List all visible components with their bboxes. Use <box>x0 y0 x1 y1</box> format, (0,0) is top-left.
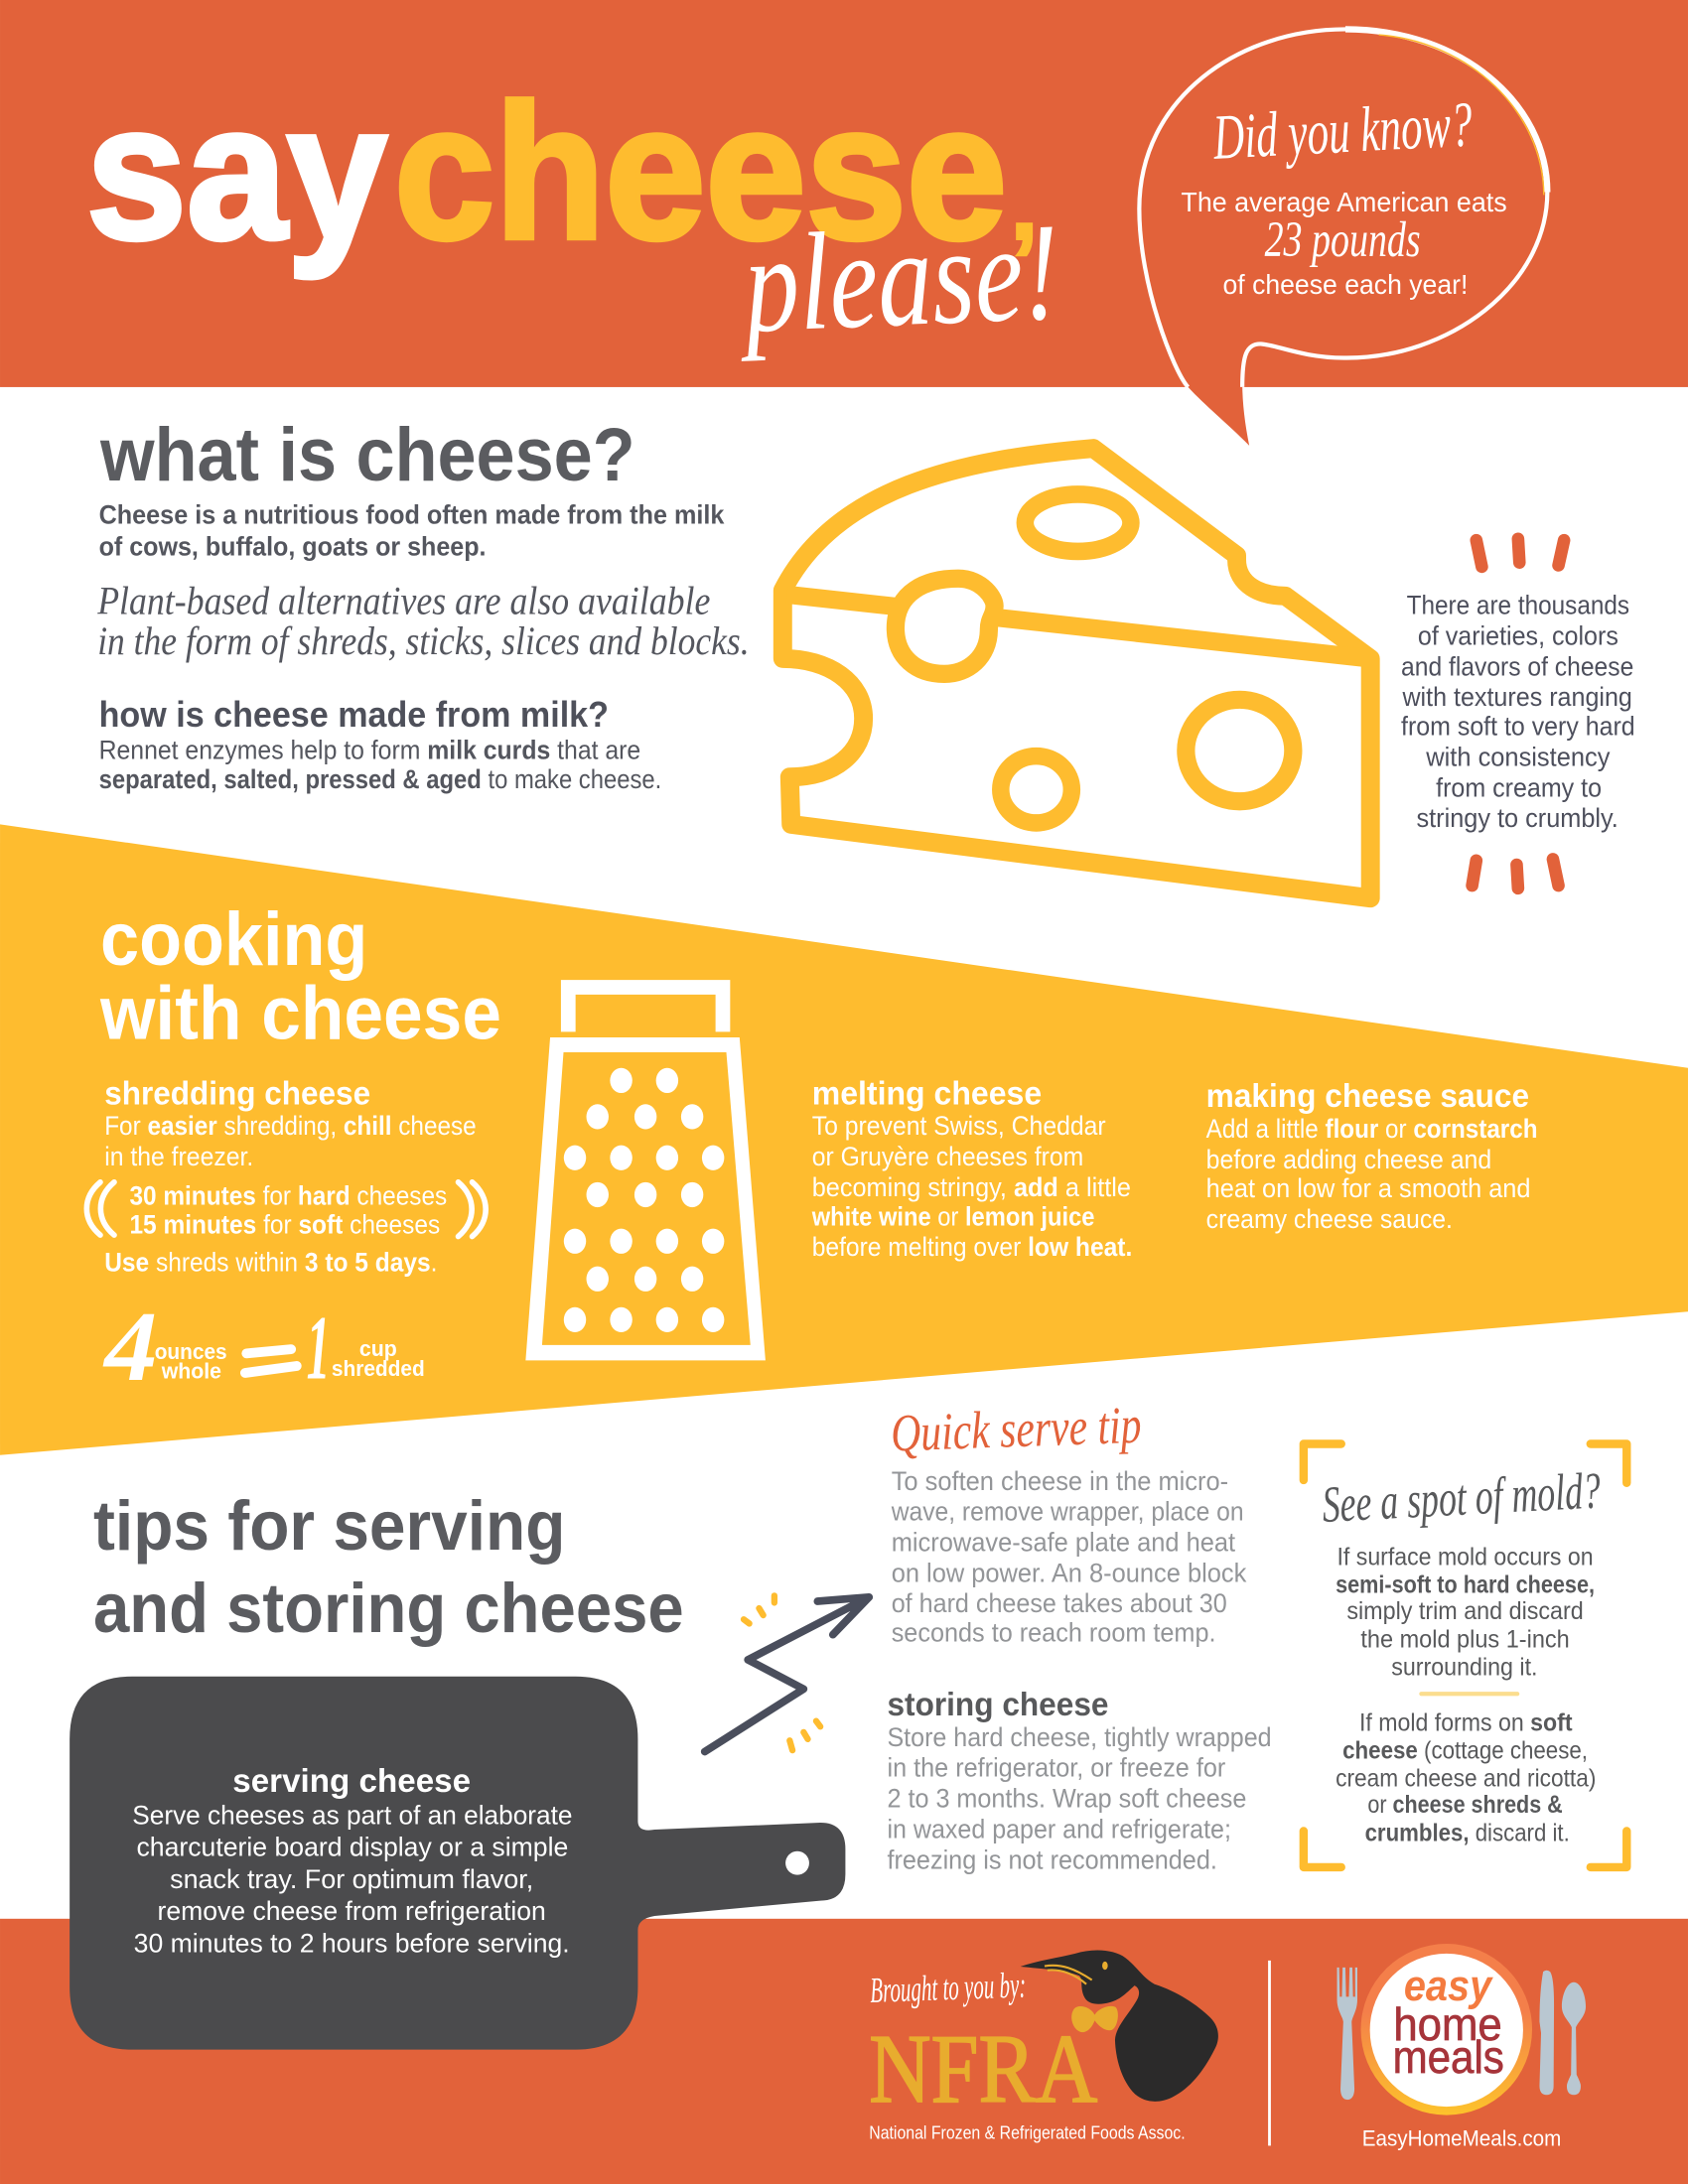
storing text: 2 to 3 months. Wrap soft cheese <box>887 1784 1246 1814</box>
shredding cheese block: in the freezer. <box>104 1142 253 1171</box>
quick serve tip block <box>890 1396 1247 1648</box>
quick serve tip block: Quick serve tip <box>890 1396 1142 1463</box>
NFRA letters: NFRA <box>869 2016 1097 2123</box>
how made text: separated, salted, pressed & aged to make cheese. <box>99 764 661 794</box>
soft cheese text: cheese (cottage cheese, <box>1342 1738 1588 1765</box>
soft cheese text: or cheese shreds & <box>1367 1792 1563 1819</box>
cheese sauce block: Add a little flour or cornstarch <box>1206 1114 1538 1144</box>
intro text <box>99 499 725 562</box>
bubble text <box>1181 187 1507 300</box>
conversion: 4 ounces = 1 cup: 4 <box>102 1291 158 1402</box>
cheese sauce block: heat on low for a smooth and <box>1206 1173 1530 1203</box>
melting cheese block: melting cheese <box>812 1075 1042 1112</box>
mold text <box>1336 1545 1595 1681</box>
icon: cheese wedge <box>782 449 1370 898</box>
heading: tips for serving and storing cheese: and storing cheese <box>93 1570 684 1647</box>
varieties text: of varieties, colors <box>1418 620 1618 650</box>
storing text: in waxed paper and refrigerate; <box>887 1814 1231 1843</box>
logo words: meals <box>1393 2031 1504 2083</box>
logo words: home <box>1393 1998 1502 2050</box>
storing cheese block: storing cheese <box>887 1687 1108 1723</box>
conversion: 4 ounces = 1 cup: whole <box>161 1359 221 1384</box>
conversion: 4 ounces = 1 cup: cup <box>359 1336 397 1361</box>
melting cheese block <box>811 1075 1132 1262</box>
tip text: on low power. An 8-ounce block <box>892 1558 1247 1587</box>
serving text <box>132 1800 572 1958</box>
storing text: in the refrigerator, or freeze for <box>887 1753 1225 1783</box>
icon: zigzag arrow <box>705 1595 869 1751</box>
footer divider <box>1268 1961 1271 2145</box>
script note: in the form of shreds, sticks, slices and blocks. <box>97 618 750 663</box>
soft cheese text: If mold forms on soft <box>1359 1709 1573 1736</box>
tip text: of hard cheese takes about 30 <box>892 1588 1227 1618</box>
melting cheese block: or Gruyère cheeses from <box>812 1142 1083 1171</box>
bubble text: The average American eats <box>1181 187 1507 217</box>
icon: knife <box>1539 1971 1554 2095</box>
serving text: Serve cheeses as part of an elaborate <box>132 1800 572 1830</box>
storing text: freezing is not recommended. <box>887 1844 1217 1874</box>
icon: grater <box>525 987 766 1360</box>
shredding cheese block: For easier shredding, chill cheese <box>104 1111 477 1141</box>
mold text: simply trim and discard <box>1346 1598 1584 1625</box>
header panel <box>0 0 1688 387</box>
storing text <box>887 1722 1272 1874</box>
conversion: 4 ounces = 1 cup: 1 <box>307 1298 330 1400</box>
soft cheese text: crumbles, discard it. <box>1365 1820 1570 1846</box>
melting cheese block: becoming stringy, add a little <box>812 1172 1131 1202</box>
icon: penguin <box>1021 1951 1218 2102</box>
intro text: Cheese is a nutritious food often made from the milk <box>99 499 725 529</box>
NFRA sponsor logo <box>869 1951 1218 2142</box>
cheese sauce block <box>1206 1078 1538 1234</box>
serving text: 30 minutes to 2 hours before serving. <box>134 1928 570 1958</box>
melting cheese block: before melting over low heat. <box>812 1232 1132 1262</box>
heading: with cheese <box>99 971 501 1055</box>
serving heading: serving cheese <box>232 1763 471 1800</box>
heading <box>99 897 501 1055</box>
soft cheese text: cream cheese and ricotta) <box>1336 1766 1596 1793</box>
subheading: how is cheese made from milk? <box>99 694 609 735</box>
cutting board panel: serving cheese <box>70 1677 845 2050</box>
varieties text: and flavors of cheese <box>1401 651 1633 681</box>
logo words <box>1393 1963 1504 2083</box>
speech bubble: did you know <box>1139 29 1547 446</box>
bubble heading: Did you know? <box>1210 88 1474 173</box>
script note: Plant-based alternatives are also available <box>96 579 710 623</box>
heading: tips for serving and storing cheese <box>93 1487 684 1647</box>
storing cheese block <box>887 1687 1272 1874</box>
storing text: Store hard cheese, tightly wrapped <box>887 1722 1272 1752</box>
serving text: charcuterie board display or a simple <box>136 1833 568 1862</box>
conversion: 4 ounces = 1 cup: shredded <box>332 1356 425 1381</box>
intro text: of cows, buffalo, goats or sheep. <box>99 532 487 562</box>
section: cooking with cheese <box>86 897 1538 1402</box>
tip text: microwave-safe plate and heat <box>892 1528 1236 1558</box>
callout: see a spot of mold <box>1304 1444 1626 1867</box>
cheese sauce block: making cheese sauce <box>1206 1078 1529 1115</box>
title: please script: please! <box>734 195 1062 362</box>
double parentheses <box>86 1182 486 1237</box>
callout: cheese varieties <box>1401 539 1635 888</box>
footer panel background <box>0 1919 1688 2184</box>
title: say cheese: say <box>86 66 387 280</box>
logo words: easy <box>1404 1963 1493 2010</box>
varieties text: with textures ranging <box>1402 682 1632 712</box>
melting cheese block: white wine or lemon juice <box>811 1201 1094 1231</box>
mold text: semi-soft to hard cheese, <box>1336 1572 1595 1599</box>
how made text: Rennet enzymes help to form milk curds that are <box>99 735 640 764</box>
shredding cheese block <box>104 1075 477 1278</box>
heading: cooking <box>100 897 367 982</box>
association name: National Frozen & Refrigerated Foods Assoc. <box>869 2121 1186 2142</box>
varieties text: from creamy to <box>1436 772 1602 802</box>
icon: spoon <box>1562 1982 1586 2095</box>
tip text: wave, remove wrapper, place on <box>891 1497 1244 1527</box>
how made text <box>99 735 661 794</box>
mold text: the mold plus 1-inch <box>1360 1626 1570 1653</box>
varieties text: stringy to crumbly. <box>1416 803 1618 833</box>
conversion: 4 ounces = 1 cup: ounces <box>155 1339 227 1364</box>
orange ticks bottom <box>1473 859 1559 888</box>
Easy Home Meals logo <box>1337 1944 1586 2150</box>
conversion: 4 ounces = 1 cup <box>102 1291 425 1402</box>
heading: tips for serving and storing cheese: tips for serving <box>93 1487 565 1565</box>
shredding cheese block: shredding cheese <box>104 1075 370 1112</box>
cheese sauce block: before adding cheese and <box>1206 1145 1491 1174</box>
section: what is cheese <box>96 413 750 794</box>
shredding cheese block: 30 minutes for hard cheeses <box>129 1180 447 1210</box>
title: say cheese: , <box>1010 146 1039 262</box>
website: EasyHomeMeals.com <box>1362 2125 1561 2150</box>
varieties text <box>1401 591 1635 833</box>
yellow cooking band background <box>0 824 1688 1455</box>
serving text: snack tray. For optimum flavor, <box>170 1864 533 1894</box>
tip text <box>891 1466 1247 1648</box>
icon: fork <box>1337 1968 1357 2100</box>
bubble text: 23 pounds <box>1265 211 1421 267</box>
title: say cheese <box>86 66 1039 280</box>
heading: what is cheese? <box>99 413 635 497</box>
orange ticks top <box>1477 539 1564 567</box>
brought to you by: Brought to you by: <box>870 1965 1027 2010</box>
mold text: surrounding it. <box>1391 1654 1538 1681</box>
tip text: To soften cheese in the micro- <box>892 1466 1228 1496</box>
soft cheese text <box>1336 1709 1596 1846</box>
bow tie <box>1071 2006 1118 2032</box>
serving text: remove cheese from refrigeration <box>158 1896 546 1926</box>
melting cheese block: To prevent Swiss, Cheddar <box>812 1111 1106 1141</box>
title: say cheese: cheese <box>394 66 1007 280</box>
varieties text: There are thousands <box>1407 591 1629 620</box>
shredding cheese block: Use shreds within 3 to 5 days. <box>104 1248 437 1278</box>
corner brackets <box>1304 1444 1626 1867</box>
varieties text: with consistency <box>1425 742 1611 771</box>
varieties text: from soft to very hard <box>1401 712 1635 742</box>
shredding cheese block: 15 minutes for soft cheeses <box>129 1210 440 1240</box>
tip text: seconds to reach room temp. <box>892 1618 1215 1648</box>
board shape <box>70 1677 845 2050</box>
cheese sauce block: creamy cheese sauce. <box>1206 1204 1453 1234</box>
bubble text: of cheese each year! <box>1223 269 1468 300</box>
mold text: If surface mold occurs on <box>1337 1545 1594 1571</box>
script note <box>96 579 750 663</box>
